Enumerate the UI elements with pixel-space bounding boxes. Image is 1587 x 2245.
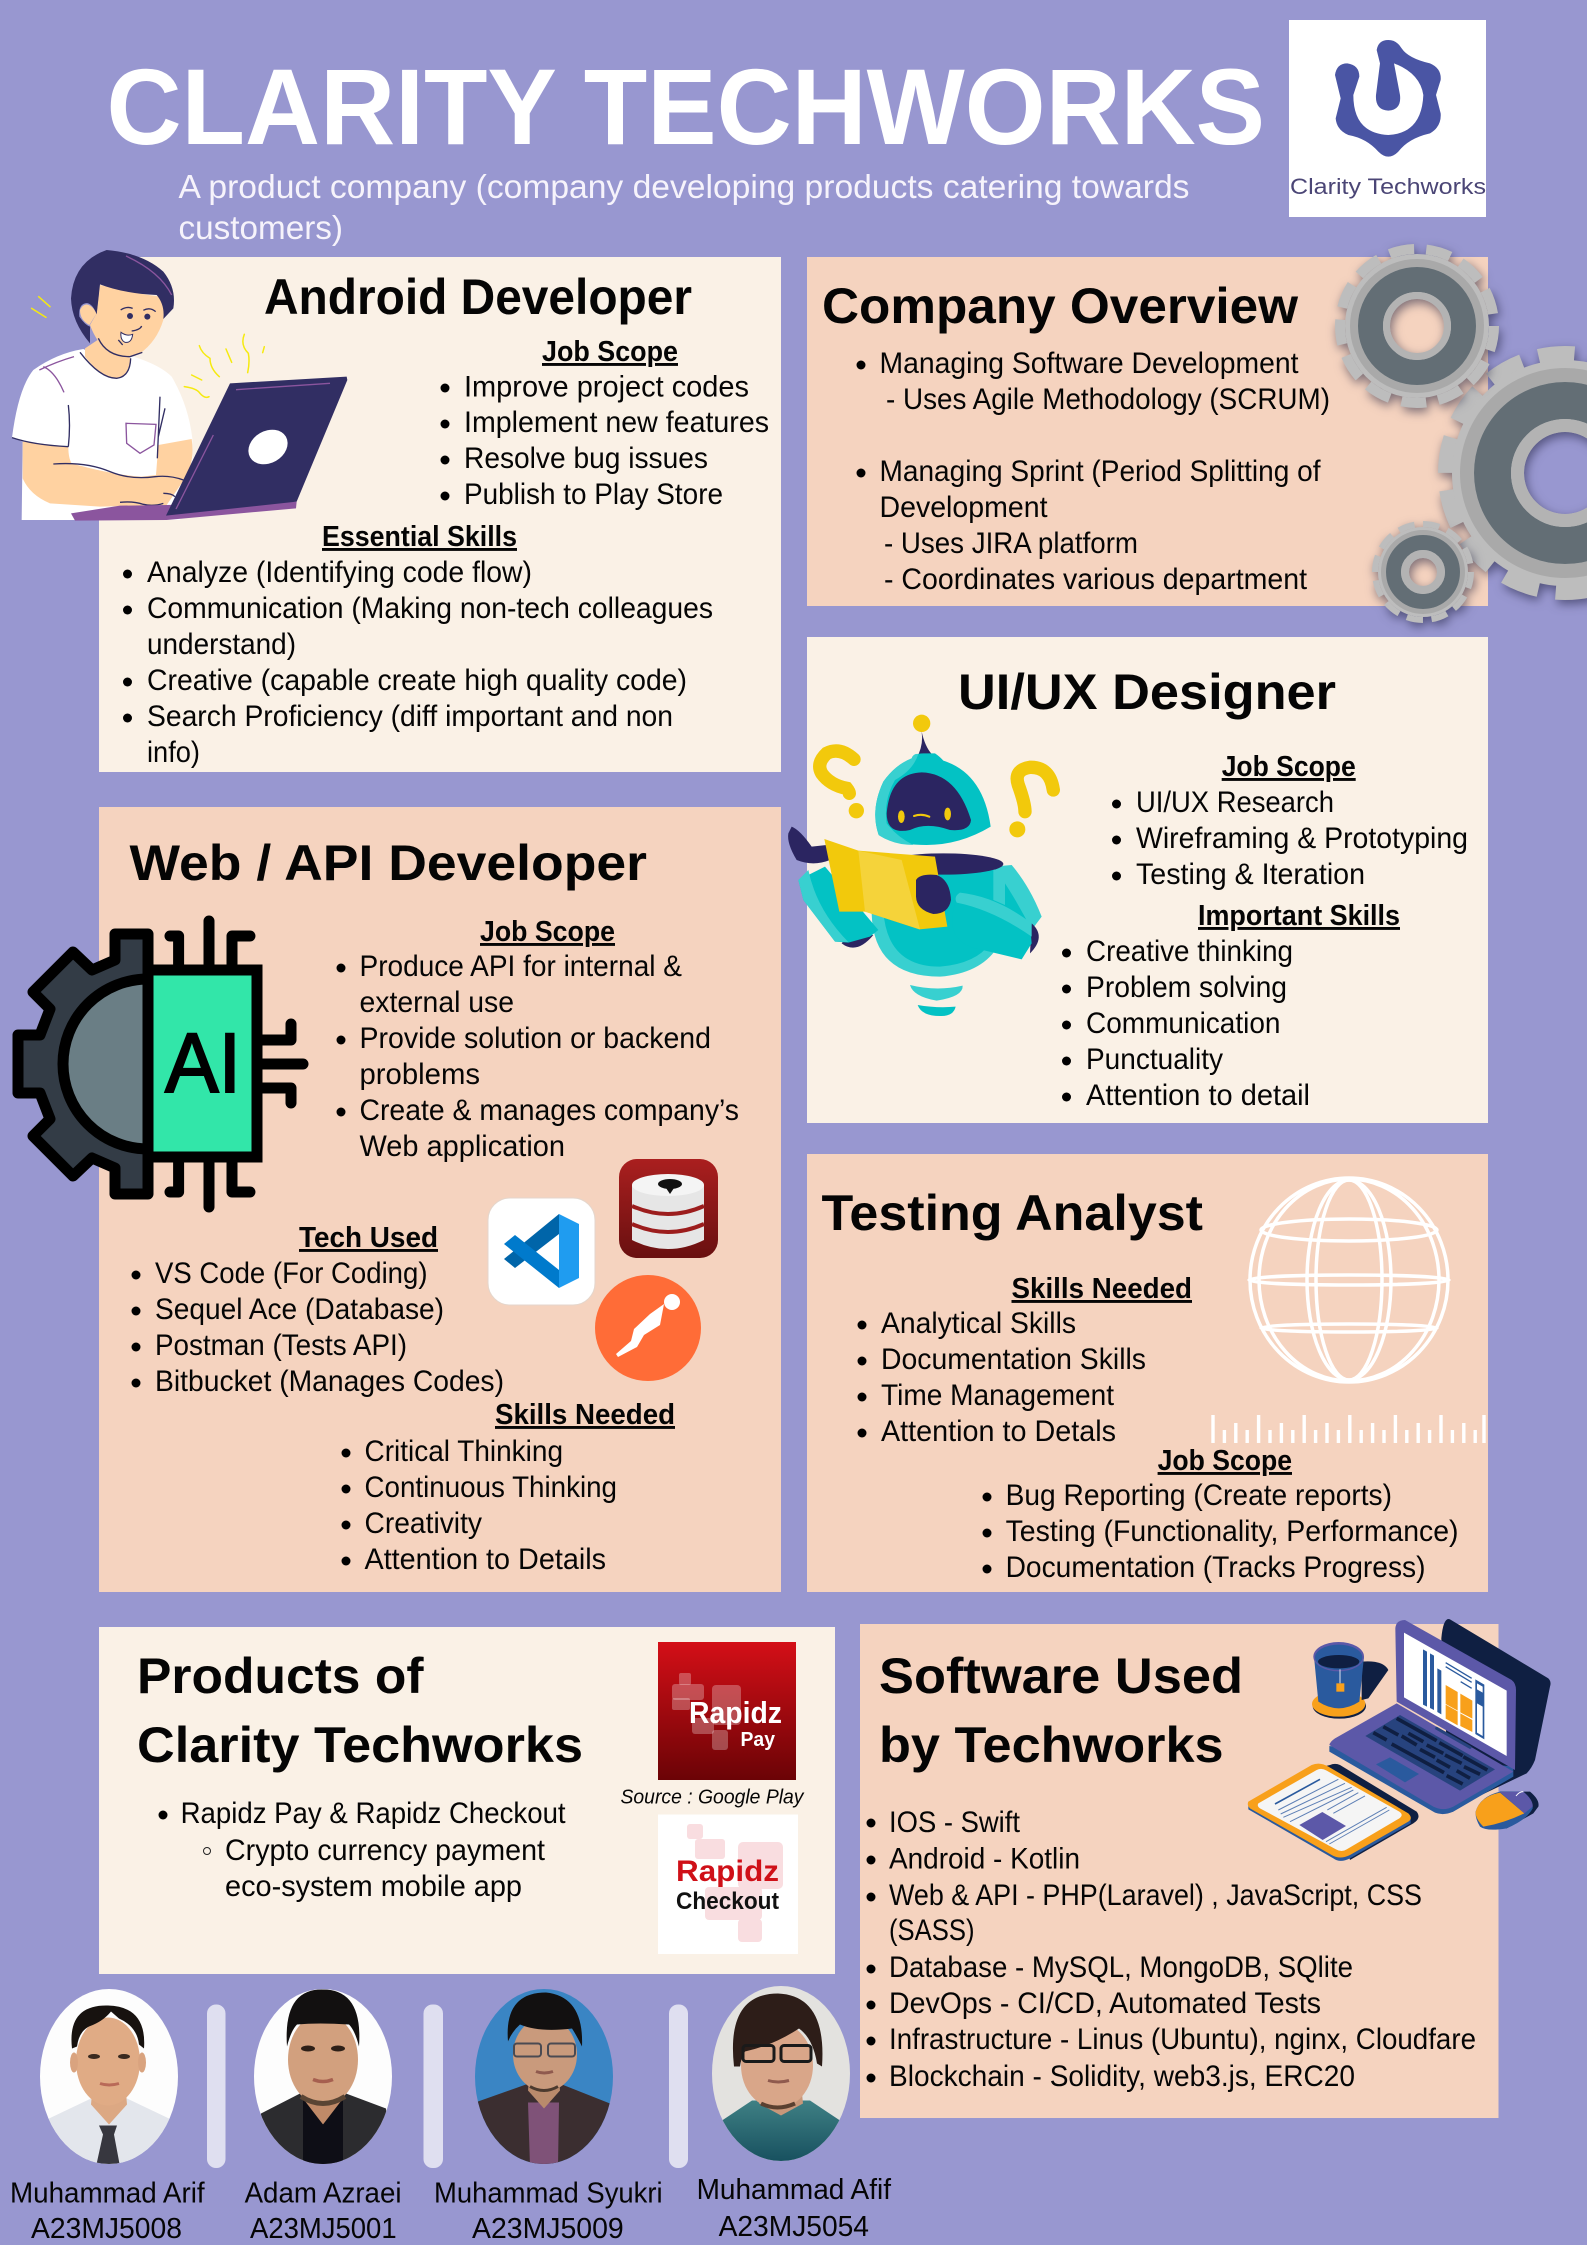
icon: gears [1340, 249, 1587, 620]
list: important skills: Problem solving [1086, 971, 1287, 1004]
logo: rapidz pay [658, 1642, 796, 1780]
list: software stack: Blockchain - Solidity, web3.js, ERC20 [889, 2060, 1355, 2093]
text block: sprint management [856, 455, 1321, 596]
student id: A23MJ5009 [472, 2213, 624, 2245]
list: essential skills: info) [147, 736, 200, 769]
list: important skills: Communication [1086, 1007, 1280, 1040]
title: CLARITY TECHWORKS [106, 46, 1265, 167]
icon: postman [595, 1275, 701, 1381]
list: software stack: IOS - Swift [889, 1806, 1021, 1839]
name: Adam Azraei [245, 2178, 402, 2210]
heading: android developer: Android Developer [264, 269, 692, 325]
logo: rapidz pay: Rapidz [689, 1695, 782, 1730]
text block: sprint management: - Uses JIRA platform [884, 527, 1138, 560]
list: ui/ux job scope [1112, 786, 1468, 891]
heading: products of clarity techworks [137, 1648, 583, 1773]
list: web skills needed: Attention to Details [364, 1543, 606, 1576]
caption: source: Source : Google Play [620, 1787, 804, 1809]
panel: company overview [807, 257, 1488, 606]
heading: software used by techworks: Software Used [879, 1648, 1243, 1704]
subheading: essential skills: Essential Skills [322, 521, 517, 553]
list: testing job scope: Testing (Functionality, Performance) [1006, 1515, 1458, 1548]
text block: products list: eco-system mobile app [225, 1870, 522, 1903]
list: web skills needed [342, 1435, 617, 1576]
heading: products of clarity techworks: Clarity Techworks [137, 1717, 583, 1773]
subheading: job scope: Job Scope [542, 336, 678, 368]
list: software stack: DevOps - CI/CD, Automated Tests [889, 1987, 1321, 2020]
team member: muhammad afif [697, 1986, 892, 2243]
list: software stack [866, 1806, 1476, 2093]
logo: Clarity Techworks [1290, 174, 1486, 199]
icon: ai chip and gear [18, 921, 303, 1207]
icon: vs code [488, 1198, 595, 1305]
list: testing skills needed: Documentation Skills [881, 1343, 1146, 1376]
illustration: laptop, cup and tablet [1248, 1619, 1551, 1861]
panel: testing analyst [807, 1154, 1488, 1592]
list: android job scope: Resolve bug issues [464, 442, 708, 475]
photo [712, 1986, 850, 2164]
heading: testing analyst: Testing Analyst [822, 1185, 1203, 1241]
heading: company overview: Company Overview [822, 278, 1298, 334]
list: essential skills: Communication (Making non-tech colleagues [147, 592, 713, 625]
list: web job scope: Provide solution or backend [360, 1022, 711, 1055]
panel: products [99, 1627, 835, 1974]
list: testing job scope: Bug Reporting (Create reports) [1006, 1479, 1392, 1512]
heading: products of clarity techworks: Products of [137, 1648, 424, 1704]
text block: software development: Managing Software Development [880, 347, 1299, 380]
list: essential skills: Creative (capable create high quality code) [147, 664, 687, 697]
list: tech used: Bitbucket (Manages Codes) [155, 1365, 504, 1398]
list: ui/ux job scope: Testing & Iteration [1136, 858, 1365, 891]
subtitle: A product company (company developing products catering towards [178, 168, 1190, 205]
team member: muhammad arif [10, 1988, 205, 2245]
subheading: tech used: Tech Used [299, 1222, 438, 1254]
list: testing skills needed [858, 1307, 1146, 1448]
list: ui/ux job scope: Wireframing & Prototyping [1136, 822, 1468, 855]
logo: rapidz pay: Pay [740, 1729, 776, 1751]
list: ui/ux job scope: UI/UX Research [1136, 786, 1334, 819]
list: tech used: Postman (Tests API) [155, 1329, 407, 1362]
text block: sprint management: - Coordinates various department [884, 563, 1308, 596]
photo [40, 1988, 178, 2166]
list: testing job scope: Documentation (Tracks Progress) [1006, 1551, 1426, 1584]
list: important skills [1062, 935, 1310, 1112]
list: software stack: Web & API - PHP(Laravel) , JavaScript, CSS [889, 1879, 1422, 1912]
name: Muhammad Syukri [434, 2178, 663, 2210]
photo [475, 1988, 613, 2166]
heading: software used by techworks [879, 1648, 1243, 1773]
list: android job scope: Publish to Play Store [464, 478, 723, 511]
icon: wireframe globe [1249, 1178, 1449, 1382]
subheading: important skills: Important Skills [1198, 900, 1400, 932]
text block: software development [856, 347, 1330, 416]
text block: sprint management: Managing Sprint (Period Splitting of [880, 455, 1321, 488]
team member: adam azraei [245, 1988, 402, 2245]
list: important skills: Creative thinking [1086, 935, 1293, 968]
list: software stack: Database - MySQL, MongoDB, SQlite [889, 1951, 1353, 1984]
list: tech used [132, 1257, 504, 1398]
list: tech used: VS Code (For Coding) [155, 1257, 428, 1290]
heading: ui/ux designer: UI/UX Designer [958, 664, 1336, 720]
icon: ai chip and gear: AI [165, 1016, 241, 1110]
list: testing skills needed: Analytical Skills [881, 1307, 1076, 1340]
list: software stack: Android - Kotlin [889, 1843, 1080, 1876]
panel: software used [860, 1624, 1498, 2118]
subheading: job scope: Job Scope [480, 916, 615, 948]
list: web skills needed: Critical Thinking [364, 1435, 563, 1468]
text block: software development: - Uses Agile Methodology (SCRUM) [886, 383, 1330, 416]
list: web job scope: Create & manages company’s [360, 1094, 739, 1127]
student id: A23MJ5054 [719, 2211, 869, 2243]
list: testing job scope [982, 1479, 1458, 1584]
list: android job scope: Implement new features [464, 406, 769, 439]
list: web job scope: problems [360, 1058, 480, 1091]
list: essential skills [123, 556, 713, 769]
subheading: skills needed: Skills Needed [495, 1399, 675, 1431]
logo: rapidz checkout: Checkout [676, 1888, 779, 1915]
heading: web / api developer: Web / API Developer [130, 835, 647, 891]
list: software stack: (SASS) [889, 1914, 974, 1947]
list: essential skills: Analyze (Identifying code flow) [147, 556, 532, 589]
list: important skills: Attention to detail [1086, 1079, 1310, 1112]
list: android job scope [440, 370, 769, 511]
list: testing skills needed: Attention to Detals [881, 1415, 1116, 1448]
text block: sprint management: Development [880, 491, 1048, 524]
text block: products list: Crypto currency payment [225, 1834, 546, 1867]
list: software stack: Infrastructure - Linus (Ubuntu), nginx, Cloudfare [889, 2023, 1476, 2056]
list: web job scope: Produce API for internal & [360, 950, 682, 983]
list: web skills needed: Continuous Thinking [364, 1471, 617, 1504]
logo: rapidz checkout: Rapidz [676, 1855, 779, 1888]
divider [207, 2004, 226, 2168]
subheading: skills needed: Skills Needed [1012, 1273, 1192, 1305]
divider [424, 2004, 443, 2168]
list: android job scope: Improve project codes [464, 370, 749, 404]
panel: web / api developer [99, 807, 781, 1592]
panel: android developer [99, 257, 781, 772]
subheading: job scope: Job Scope [1222, 751, 1356, 783]
illustration: robot reading [788, 715, 1053, 1016]
text block: products list: Rapidz Pay & Rapidz Checkout [181, 1797, 566, 1830]
list: web job scope [336, 950, 739, 1163]
name: Muhammad Arif [10, 2178, 205, 2210]
student id: A23MJ5001 [250, 2213, 397, 2245]
divider [669, 2004, 688, 2168]
list: essential skills: Search Proficiency (diff important and non [147, 700, 673, 733]
list: essential skills: understand) [147, 628, 296, 661]
panel: ui/ux designer [807, 637, 1488, 1123]
illustration: developer with laptop [12, 250, 347, 521]
list: important skills: Punctuality [1086, 1043, 1223, 1076]
list: testing skills needed: Time Management [881, 1379, 1115, 1412]
text block: products list [158, 1797, 566, 1903]
subheading: job scope: Job Scope [1158, 1445, 1292, 1477]
subtitle: customers) [178, 209, 343, 246]
logo: rapidz checkout [658, 1814, 798, 1954]
list: web skills needed: Creativity [364, 1507, 482, 1540]
list: web job scope: Web application [360, 1130, 565, 1163]
list: tech used: Sequel Ace (Database) [155, 1293, 444, 1326]
team member: muhammad syukri [434, 1988, 663, 2245]
name: Muhammad Afif [697, 2174, 892, 2206]
photo [254, 1988, 392, 2166]
student id: A23MJ5008 [31, 2213, 182, 2245]
icon: sequel ace [619, 1159, 718, 1258]
logo [1289, 20, 1486, 217]
heading: software used by techworks: by Techworks [879, 1717, 1224, 1773]
list: web job scope: external use [360, 986, 514, 1019]
subtitle [178, 168, 1190, 246]
ruler tick marks [1213, 1415, 1484, 1443]
